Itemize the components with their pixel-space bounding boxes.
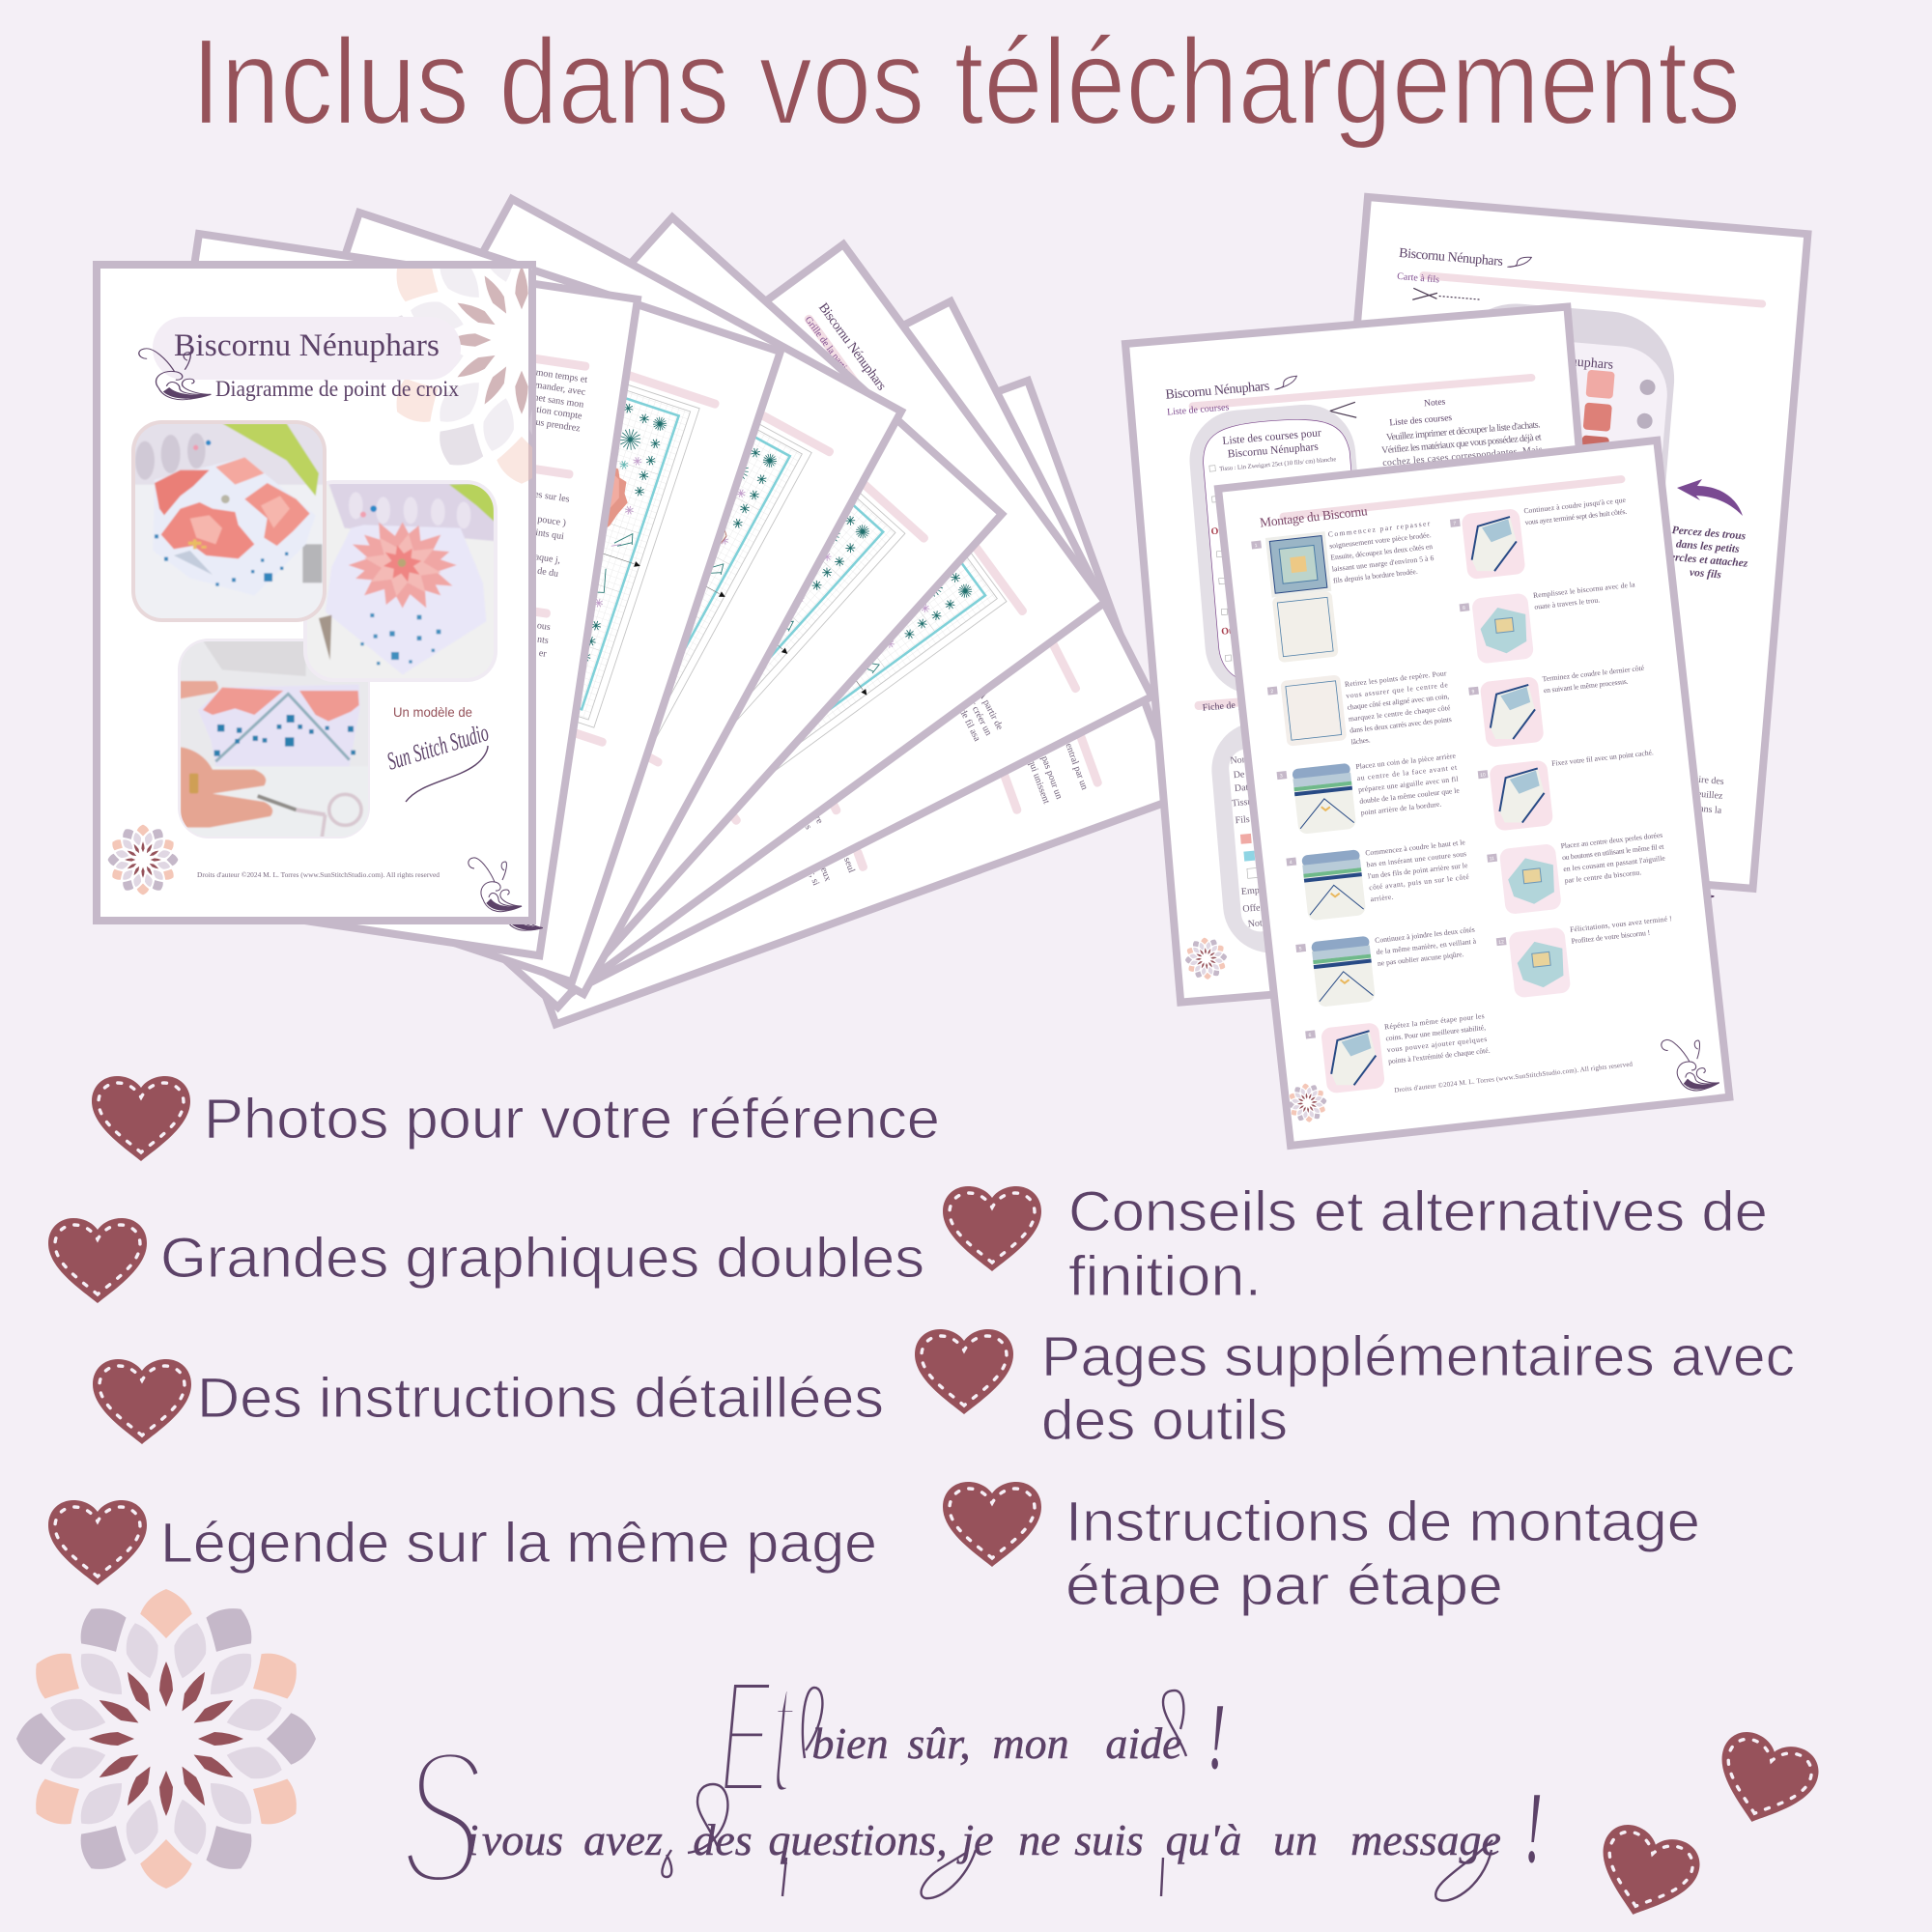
- photo 2: [302, 480, 499, 682]
- bullet: assembly: [1065, 1491, 1700, 1617]
- page 7: is pas pour un: [1036, 747, 1065, 801]
- script line 1: Et: [720, 1646, 796, 1829]
- icon: heart 6: [915, 1329, 1013, 1414]
- step 1: Ensuite, découpez les deux côtés en: [1330, 542, 1434, 562]
- mandala icon: [1183, 936, 1229, 981]
- arrow: curved purple: [1677, 479, 1743, 516]
- script flourishes: [662, 1688, 1492, 1901]
- subheading: Liste de courses: [1167, 402, 1230, 418]
- step 1: Commencez par repasser: [1327, 519, 1431, 539]
- step 4: l'un des fils de point arrière sur le: [1367, 861, 1468, 880]
- pink rule: [1419, 271, 1767, 308]
- script line 2: qu'à: [1166, 1815, 1241, 1864]
- step 1: [1251, 519, 1444, 665]
- heading: Montage du Biscornu: [1259, 503, 1368, 529]
- sheet: [1125, 307, 1623, 1003]
- page 1 text page: ces sur les: [529, 489, 570, 505]
- thread card inner: [1440, 333, 1671, 603]
- notes column: Liste des courses: [1389, 413, 1453, 428]
- list title: [1222, 427, 1323, 461]
- page 1 text page: [100, 234, 638, 955]
- step 3: double de la même couleur que le: [1359, 785, 1461, 806]
- bullet: extra pages: Pages supplémentaires avec: [1041, 1325, 1795, 1388]
- script line 1: [720, 1646, 1226, 1829]
- step 2: 2: [1270, 689, 1274, 695]
- step 3: au centre de la face avant et: [1356, 763, 1458, 782]
- page: thread card: [1312, 197, 1807, 906]
- step 4: 4: [1290, 860, 1293, 866]
- step 2: [1266, 663, 1454, 754]
- script line 1: bien: [811, 1719, 889, 1768]
- bullet: photos: Photos pour votre référence: [204, 1088, 940, 1151]
- note: percez des trous: cercles et attachez: [1664, 552, 1748, 570]
- note: percez des trous: Percez des trous: [1671, 525, 1747, 542]
- page 5 chart: Grille de la partie arrière: [803, 315, 867, 399]
- sheet: [1313, 197, 1807, 889]
- page 7: ceux: [817, 862, 833, 883]
- icon: heart 5: [943, 1186, 1041, 1271]
- notes column: Notes: [1424, 397, 1446, 409]
- page 7: [404, 381, 1179, 1024]
- step 5: [1295, 924, 1482, 1009]
- cover corner swirl: [469, 858, 522, 912]
- step 1: laissant une marge d'environ 5 à 6: [1331, 554, 1435, 574]
- script line 2: suis: [1074, 1815, 1144, 1864]
- page 7: r, si: [807, 870, 821, 887]
- page 1 text page: ( pouce ): [531, 513, 567, 528]
- page 1 text page: ous prendrez: [530, 416, 582, 435]
- bullet: legend: Légende sur la même page: [160, 1512, 877, 1575]
- step 6: points à l'extrémité de chaque côté.: [1388, 1046, 1491, 1065]
- project card rows: De :: [1233, 769, 1250, 781]
- step 11: ou boutons en utilisant le même fil et: [1562, 842, 1665, 862]
- sheet: [1218, 440, 1729, 1146]
- project card frame: [1208, 713, 1381, 956]
- card title: Biscornu Nénuphars: [1502, 349, 1614, 373]
- step 2: Retirez les points de repère. Pour: [1345, 668, 1447, 689]
- script line 2: S: [400, 1709, 484, 1925]
- scissors: [1412, 288, 1481, 305]
- corner swirl: [1647, 831, 1719, 903]
- project card rows: [1228, 752, 1297, 930]
- script line 2: avez: [583, 1815, 663, 1864]
- cover mandala icon: [108, 825, 178, 895]
- step 5: ne pas oublier aucune piqûre.: [1377, 950, 1464, 968]
- page 4 chart: [228, 217, 1002, 1008]
- step 2: lâches.: [1350, 735, 1371, 746]
- page 1 text page: de du: [536, 566, 559, 580]
- script line 1: mon: [992, 1719, 1069, 1768]
- step 8: [1459, 580, 1642, 666]
- bullet: extra pages: des outils: [1041, 1389, 1288, 1452]
- notes column: cochez les cases correspondantes. Mais: [1382, 444, 1543, 469]
- step 12: Profitez de votre biscornu !: [1571, 928, 1651, 946]
- un modèle de: Un modèle de: [393, 704, 472, 720]
- step 5: Continuez à joindre les deux côtés: [1375, 925, 1475, 945]
- bullet: tips: Conseils et alternatives de: [1068, 1180, 1768, 1243]
- lower notes: ans la: [1699, 804, 1722, 816]
- step 2: dans les deux carrés avec des points: [1350, 715, 1452, 735]
- cover swirl: [139, 349, 211, 400]
- step 3: 3: [1280, 773, 1283, 780]
- step 6: [1305, 1010, 1492, 1095]
- copyright: Droits d'auteur ©2024 M. L. Torres (www.SunStitchStudio.com). All rights reserved: [1394, 1060, 1634, 1094]
- note: percez des trous: [1663, 525, 1751, 583]
- step 11: Placez au centre deux perles dorées: [1560, 831, 1663, 850]
- step 11: 11: [1489, 856, 1494, 862]
- step 11: par le centre du biscornu.: [1564, 867, 1642, 885]
- step 10: [1477, 748, 1661, 833]
- swatches: [1580, 370, 1657, 468]
- panel: fanned pattern pages: [100, 199, 1179, 1024]
- script line 2: vous: [482, 1815, 563, 1864]
- step 9: en suivant le même processus.: [1543, 677, 1629, 695]
- step 6: coins. Pour une meilleure stabilité,: [1385, 1023, 1486, 1042]
- step 7: 7: [1453, 521, 1457, 526]
- note: percez des trous: vos fils: [1690, 567, 1722, 581]
- lower notes: [1690, 774, 1725, 816]
- step 12: [1495, 914, 1679, 1000]
- step 6: Répétez la même étape pour les: [1384, 1011, 1485, 1031]
- copyright: Droits d'auteur ©2024 M. L. Torres (www.SunStitchStudio.com). All rights reserved: [197, 870, 440, 879]
- page: shopping list: [1125, 307, 1623, 1003]
- scissors: [1303, 402, 1356, 422]
- step 4: Commencez à coudre le haut et le: [1365, 838, 1466, 858]
- page 6: ntre: [809, 808, 825, 826]
- project card rows: Date: [1234, 782, 1254, 794]
- flourish: [1273, 376, 1297, 389]
- page 1 text page: oints qui: [530, 526, 565, 542]
- step 3: préparez une aiguille avec un fil: [1358, 775, 1459, 794]
- step 3: Placez un coin de la pièce arrière: [1355, 752, 1457, 771]
- bullet: assembly: étape par étape: [1065, 1554, 1503, 1617]
- step 4: [1286, 838, 1472, 923]
- thread card frame: [1430, 298, 1680, 606]
- project sheet label: Fiche de projet: [1202, 698, 1261, 714]
- step 10: 10: [1480, 772, 1486, 779]
- page 6: [359, 301, 1151, 998]
- page 6: les: [799, 817, 813, 832]
- photo 1: [131, 420, 327, 622]
- cover sheet: [97, 265, 532, 921]
- step 5: de la même manière, en veillant à: [1376, 936, 1477, 956]
- cover subtitle: Diagramme de point de croix: [215, 377, 459, 401]
- script line 1: aide: [1105, 1719, 1182, 1768]
- step 8: 8: [1463, 606, 1465, 611]
- script line 1: !: [1208, 1685, 1226, 1789]
- page 7: seul: [841, 856, 857, 874]
- page 3 chart: [194, 199, 901, 994]
- script line 2: des: [693, 1815, 753, 1864]
- note: percez des trous: dans les petits: [1675, 538, 1741, 555]
- bullet: extra pages: [1041, 1325, 1795, 1452]
- page 6: . À partir de: [974, 685, 1006, 732]
- icon: tilted heart left: [1586, 1818, 1706, 1930]
- list rows: Ou: [1221, 626, 1235, 638]
- step 9: Terminez de coudre le dernier côté: [1542, 664, 1645, 683]
- icon: large mandala: [16, 1589, 316, 1889]
- script line 2: un: [1273, 1815, 1318, 1864]
- script line 1: sûr,: [907, 1719, 971, 1768]
- step 7: Continuez à coudre jusqu'à ce que: [1523, 496, 1627, 515]
- step 10: Fixez votre fil avec un point caché.: [1551, 748, 1654, 768]
- project card rows: Offert à: [1242, 901, 1274, 915]
- script line 2: message: [1350, 1815, 1501, 1864]
- project card rows: Fils :: [1235, 814, 1255, 826]
- subheading: Carte à fils: [1397, 271, 1440, 285]
- bullet: instructions: Des instructions détaillées: [197, 1367, 884, 1430]
- step 11: [1487, 831, 1670, 916]
- bullet: assembly: Instructions de montage: [1065, 1491, 1700, 1553]
- icon: tilted heart right: [1705, 1725, 1825, 1837]
- mandala icon: [1286, 1081, 1329, 1124]
- list rows: [1206, 455, 1352, 662]
- step 2: chaque côté est aligné avec un coin,: [1347, 692, 1450, 712]
- step 4: bas en insérant une couture sous: [1366, 849, 1467, 868]
- step 1: soigneusement votre pièce brodée.: [1329, 530, 1432, 551]
- pink rule: [1188, 374, 1536, 411]
- page: assembly instructions: [1218, 440, 1729, 1146]
- signature: [384, 718, 492, 802]
- cover title pill: [153, 317, 461, 380]
- step 6: vous pouvez ajouter quelques: [1386, 1035, 1488, 1054]
- list card frame: [1185, 401, 1375, 698]
- project card rows: Emplacement: [1240, 882, 1294, 897]
- cover faded mandala: [396, 269, 532, 484]
- page 2 chart with flower: [151, 213, 781, 981]
- heading: Biscornu Nénuphars: [1165, 380, 1270, 403]
- list card inner: [1200, 414, 1368, 685]
- heading: Biscornu Nénuphars: [1399, 246, 1503, 270]
- icon: heart 2: [48, 1218, 147, 1303]
- step 9: [1468, 664, 1652, 749]
- page 1 text page: aque j,: [534, 552, 561, 566]
- page 7: central par un: [1062, 738, 1090, 791]
- icon: heart 3: [93, 1359, 191, 1444]
- icon: heart 4: [48, 1500, 147, 1585]
- step 4: côté avant, puis un sur le côté: [1369, 872, 1470, 892]
- pink rule: [1279, 475, 1626, 521]
- page 6: de fil asa: [957, 707, 982, 744]
- page 6: pour créer un: [961, 687, 994, 737]
- step 6: 6: [1308, 1033, 1312, 1038]
- step 5: 5: [1298, 946, 1302, 952]
- step 2: vous assurer que le centre de: [1346, 680, 1449, 700]
- page 1 text page: ernet sans mon: [526, 391, 584, 411]
- notes column: Veuillez imprimer et découper la liste d'achats.: [1386, 419, 1541, 443]
- signature: Sun Stitch Studio: [384, 718, 492, 776]
- project card rows: Tissu :: [1232, 796, 1258, 809]
- step 1: 1: [1254, 543, 1258, 549]
- project card rows: Notes: [1247, 918, 1271, 929]
- project card rows: Nom: [1230, 754, 1250, 766]
- page 5 chart: [308, 244, 1105, 994]
- page 1 text page: demander, avec: [526, 379, 586, 398]
- notes column: [1378, 389, 1543, 469]
- script line 2: ne: [1018, 1815, 1061, 1864]
- bullet: charts: Grandes graphiques doubles: [160, 1227, 924, 1290]
- step 11: en les cousant en passant l'aiguille: [1563, 853, 1666, 873]
- lower notes: aire des: [1693, 774, 1724, 787]
- step 9: 9: [1471, 689, 1475, 695]
- step 7: [1449, 496, 1633, 581]
- icon: heart 1: [92, 1076, 190, 1161]
- step 2: marquez le centre de chaque côté: [1348, 703, 1451, 724]
- page 7: qui unissent: [1026, 758, 1052, 806]
- step 3: [1276, 752, 1463, 837]
- script line 2: i: [467, 1815, 478, 1864]
- project sheet label: [1194, 696, 1272, 714]
- list rows: Ou: [1210, 526, 1225, 537]
- step 8: Remplissez le biscornu avec de la: [1533, 580, 1636, 600]
- list rows: Tissu : Lin Zweigart 25ct (10 fils/ cm) blanche: [1219, 456, 1337, 472]
- bullet: tips: [1068, 1180, 1768, 1308]
- step 8: ouate à travers le trou.: [1534, 595, 1601, 611]
- project card inner: [1228, 739, 1378, 933]
- script line 2: !: [1524, 1773, 1543, 1885]
- cover title: Biscornu Nénuphars: [174, 328, 440, 363]
- step 1: fils depuis la bordure brodée.: [1333, 567, 1418, 584]
- notes column: Vérifiez les matériaux que vous possédez déjà et: [1381, 432, 1542, 456]
- script line 2: je: [956, 1815, 994, 1864]
- page 1 text page: er: [538, 648, 548, 660]
- title: Inclus dans vos téléchargements: [191, 14, 1741, 150]
- corner swirl: [1661, 1035, 1719, 1094]
- page 5 chart: Biscornu Nénuphars: [815, 300, 889, 393]
- step 12: 12: [1498, 939, 1504, 946]
- step 12: Félicitations, vous avez terminé !: [1570, 914, 1672, 934]
- list title: Biscornu Nénuphars: [1227, 441, 1320, 461]
- script line 2: [400, 1709, 1543, 1925]
- panel: cover page: [93, 261, 536, 924]
- step 4: arrière.: [1370, 893, 1394, 903]
- list title: Liste des courses pour: [1222, 427, 1321, 447]
- page 1 text page: ation compte: [531, 404, 583, 422]
- photo 3: [174, 638, 374, 843]
- script line 2: questions,: [768, 1815, 948, 1864]
- bullet: tips: finition.: [1068, 1245, 1262, 1308]
- page 1 text page: ous: [536, 620, 552, 633]
- flourish: [1507, 255, 1531, 269]
- lower notes: Veuillez: [1690, 788, 1723, 802]
- page 1 text page: r, mon temps et: [527, 366, 588, 385]
- page 1 text page: nts: [536, 634, 550, 646]
- step 3: point arrière de la bordure.: [1360, 800, 1442, 817]
- icon: heart 7: [943, 1482, 1041, 1567]
- step 7: vous ayez terminé sept des huit côtés.: [1524, 507, 1628, 526]
